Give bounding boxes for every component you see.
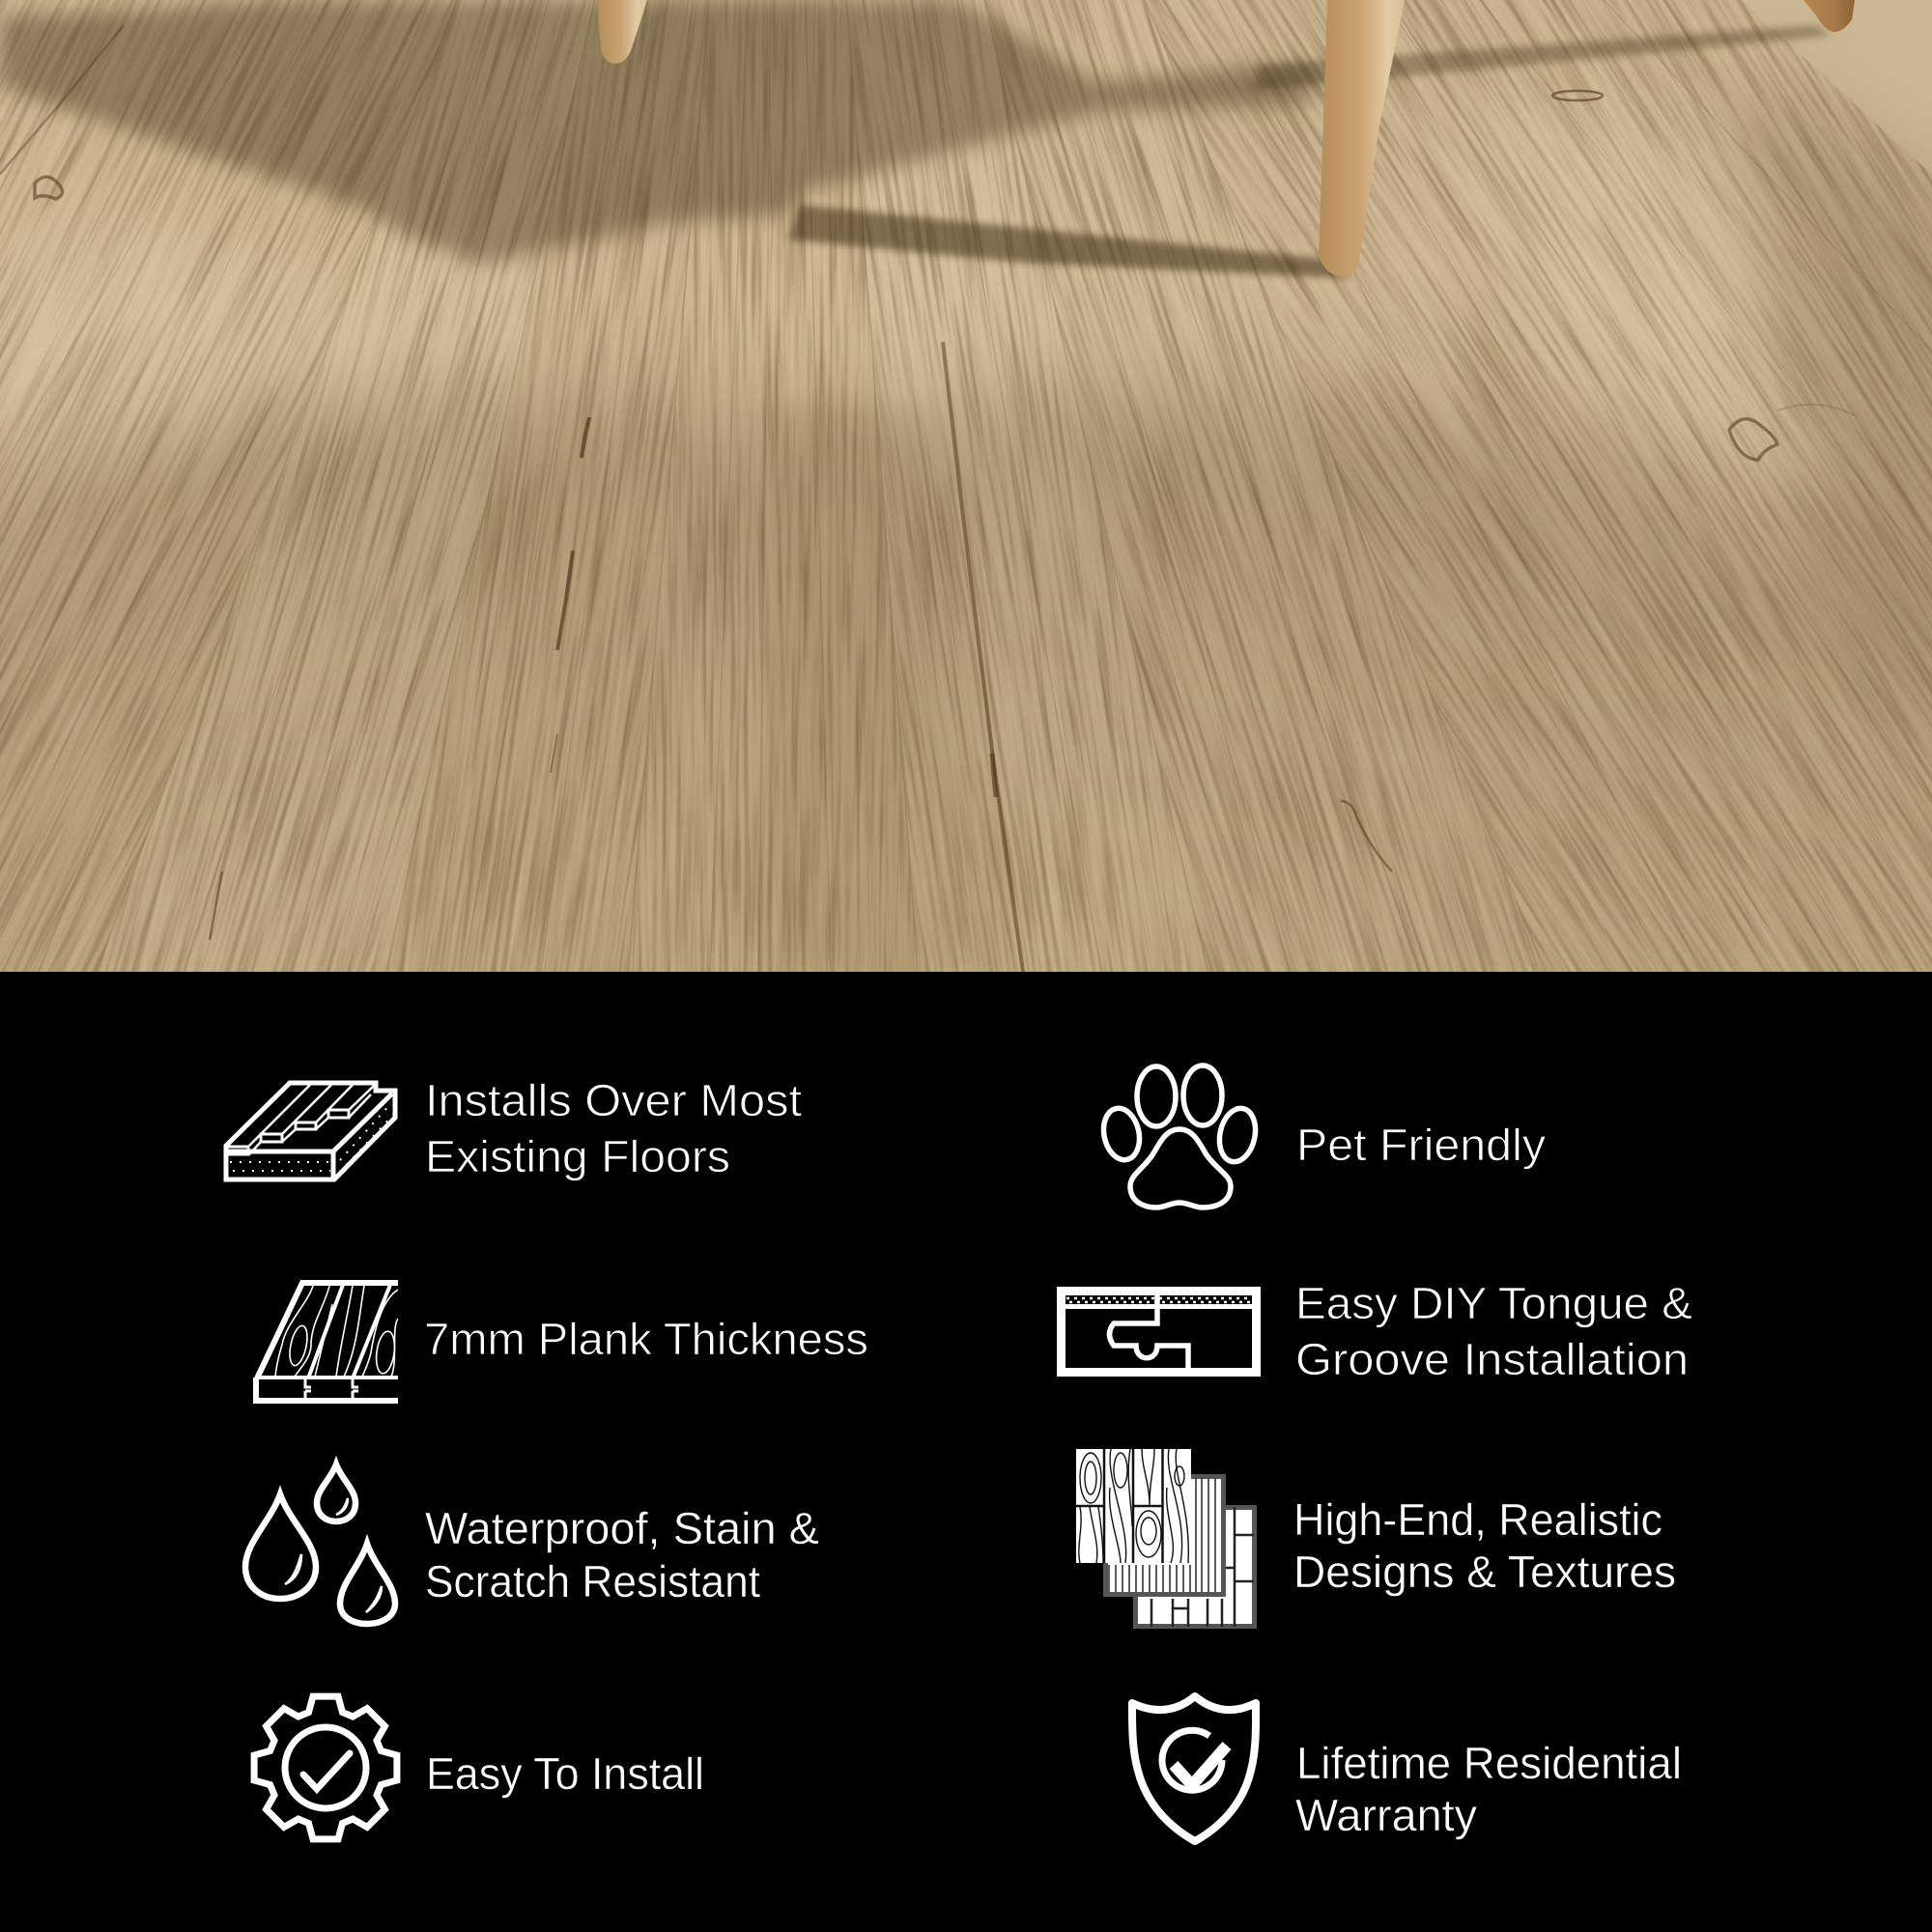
text: 7mm plank thickness: 7mm Plank Thickness — [424, 1314, 868, 1364]
feature: easy to install — [254, 1696, 704, 1839]
text: installs over most existing floors: Installs Over Most — [425, 1075, 802, 1125]
text: lifetime residential warranty — [1295, 1738, 1682, 1840]
feature: easy DIY tongue and groove installation — [1061, 1278, 1692, 1384]
text: high-end, realistic designs and textures — [1293, 1494, 1676, 1597]
right side shadow — [1739, 68, 1932, 734]
feature: high-end, realistic designs and textures — [1076, 1449, 1676, 1627]
text: waterproof, stain and scratch resistant — [425, 1503, 819, 1606]
text: installs over most existing floors — [425, 1075, 802, 1181]
text: lifetime residential warranty: Warranty — [1295, 1790, 1477, 1840]
text: high-end, realistic designs and textures: High-End, Realistic — [1293, 1494, 1662, 1545]
icon: gear with check — [254, 1696, 397, 1839]
text: waterproof, stain and scratch resistant: Waterproof, Stain & — [425, 1503, 819, 1553]
feature: installs over most existing floors — [226, 1075, 802, 1181]
feature: pet friendly — [1099, 1065, 1546, 1208]
text: easy DIY tongue and groove installation: Easy DIY Tongue & — [1295, 1278, 1692, 1328]
text: easy DIY tongue and groove installation — [1295, 1278, 1692, 1384]
feature: lifetime residential warranty — [1132, 1696, 1682, 1841]
text: installs over most existing floors: Existing Floors — [425, 1131, 730, 1181]
icon: layered floor — [226, 1083, 395, 1179]
icon: tongue and groove joint — [1061, 1291, 1256, 1372]
icon: water drops — [245, 1464, 395, 1624]
feature: waterproof, stain and scratch resistant — [245, 1464, 819, 1624]
icon: wood plank — [256, 1283, 406, 1401]
leg cast shadow — [788, 205, 1352, 278]
text: easy DIY tongue and groove installation: Groove Installation — [1295, 1334, 1689, 1384]
icon: paw print — [1099, 1065, 1260, 1208]
darker central plank zone — [774, 413, 1003, 963]
text: high-end, realistic designs and textures: Designs & Textures — [1293, 1547, 1676, 1597]
text: easy to install: Easy To Install — [426, 1748, 704, 1799]
text: lifetime residential warranty: Lifetime Residential — [1296, 1738, 1682, 1788]
text: pet friendly: Pet Friendly — [1296, 1120, 1546, 1170]
feature: 7mm plank thickness — [256, 1283, 868, 1401]
icon: texture swatches — [1076, 1449, 1254, 1627]
photo: wood plank floor with chair legs — [0, 0, 1932, 972]
cracks and knots — [0, 25, 1855, 972]
soft lower shadow — [0, 377, 1932, 1063]
chair shadow on floor — [0, 0, 1314, 265]
chair legs — [597, 0, 1855, 277]
right leg cast shadow — [1256, 25, 1831, 90]
icon: shield with check — [1132, 1696, 1256, 1841]
text: waterproof, stain and scratch resistant: Scratch Resistant — [425, 1556, 760, 1606]
highlights — [0, 255, 338, 469]
